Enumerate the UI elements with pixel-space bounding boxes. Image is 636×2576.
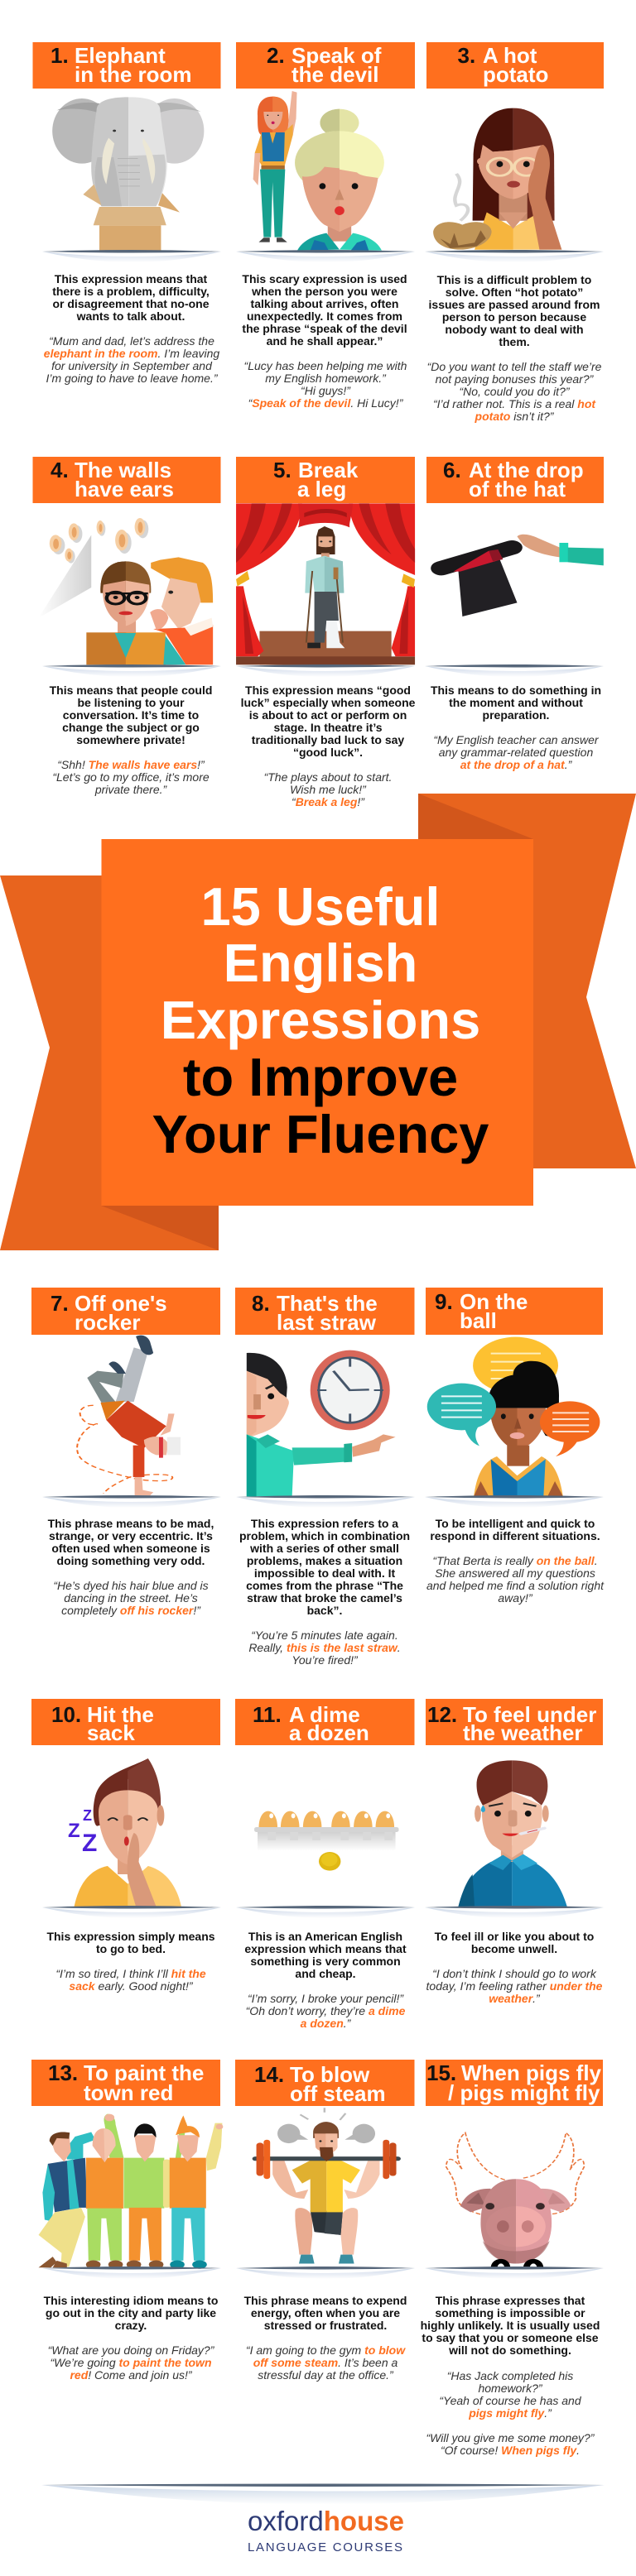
heading 3: A hot	[483, 43, 537, 68]
text: example 13: red! Come and join us!”	[70, 2368, 193, 2382]
panel 7: off one's rocker	[31, 1288, 221, 1617]
text: example 12	[426, 1967, 603, 2005]
heading 1	[33, 42, 220, 89]
icon: woman with speech bubbles	[427, 1337, 600, 1496]
text: meaning 12	[435, 1930, 594, 1955]
logo: oxford house language courses: oxfordhouse	[248, 2506, 404, 2536]
text: meaning 14: energy, often when you are	[251, 2306, 400, 2319]
text: meaning 3	[429, 273, 600, 348]
text: example 7	[53, 1579, 209, 1617]
text: meaning 15: highly unlikely. It is usually used	[421, 2319, 600, 2332]
text: meaning 15: something is impossible or	[435, 2306, 585, 2319]
text: meaning 8: with a series of other small	[249, 1542, 399, 1555]
icon: breakdancer on one hand	[77, 1336, 181, 1495]
text: example 8	[248, 1629, 401, 1667]
heading 14: off steam	[290, 2081, 386, 2106]
heading 6	[426, 457, 604, 503]
heading 2: 2.	[267, 43, 285, 68]
text: meaning 11	[244, 1930, 407, 1980]
heading 2: the devil	[292, 62, 378, 87]
text: example 14: stressful day at the office.”	[258, 2368, 394, 2382]
heading 9: On the	[460, 1289, 528, 1314]
text: example 3: not paying bonuses this year?”	[436, 372, 595, 386]
text: meaning 6: the moment and without	[449, 696, 583, 709]
text: meaning 3: nobody want to deal with	[445, 323, 584, 336]
text: meaning 8: back”.	[307, 1604, 342, 1617]
heading 10: sack	[87, 1720, 135, 1745]
text: meaning 12: become unwell.	[471, 1942, 557, 1955]
panel 4: the walls have ears	[33, 457, 221, 796]
heading 8: last straw	[277, 1310, 377, 1335]
text: example 2: “Lucy has been helping me with	[244, 359, 407, 372]
heading 11: A dime	[289, 1702, 360, 1727]
text: meaning 1: wants to talk about.	[76, 309, 185, 323]
text: meaning 8: impossible to deal with. It	[254, 1566, 396, 1580]
text: example 4: “Let’s go to my office, it’s more	[52, 770, 210, 784]
text: meaning 14: stressed or frustrated.	[264, 2319, 387, 2332]
text: example 2: “Hi guys!”	[301, 384, 351, 397]
text: meaning 3: This is a difficult problem to	[437, 273, 591, 286]
icon: yawning man	[75, 1758, 181, 1907]
panel 3: a hot potato	[425, 42, 604, 423]
text: meaning 13	[44, 2294, 218, 2332]
icon: elephant in a box	[52, 97, 204, 251]
heading 12: the weather	[463, 1720, 583, 1745]
logo: oxford house language courses	[248, 2506, 404, 2554]
heading 15: 15.	[426, 2060, 456, 2085]
heading 4: have ears	[75, 477, 174, 501]
heading 10: 10.	[51, 1702, 81, 1727]
text: meaning 8: This expression refers to a	[251, 1517, 398, 1530]
panel 12: to feel under the weather	[425, 1699, 604, 2005]
title: Your Fluency	[152, 1104, 489, 1164]
text: meaning 1: there is a problem, difficulty,	[52, 285, 210, 298]
heading 3: 3.	[457, 43, 475, 68]
text: meaning 10: to go to bed.	[96, 1942, 166, 1955]
heading 13: 13.	[48, 2060, 78, 2085]
text: example 13	[48, 2343, 215, 2382]
heading 4	[33, 457, 220, 503]
heading 12: 12.	[427, 1702, 457, 1727]
text: meaning 2: talking about arrives, often	[251, 297, 398, 310]
text: meaning 5: is about to act or perform on	[249, 708, 407, 722]
heading 12: To feel under	[463, 1702, 596, 1727]
text: example 9: She answered all my questions	[435, 1566, 595, 1580]
text: meaning 8: problem, which in combination	[239, 1529, 410, 1542]
heading 5: 5.	[273, 458, 292, 482]
text: example 2: my English homework.”	[265, 372, 387, 385]
text: example 15: “Of course! When pigs fly.	[441, 2444, 580, 2457]
text: example 11	[246, 1992, 406, 2030]
text: meaning 9	[430, 1517, 600, 1542]
text: example 15: “Yeah of course he has and	[439, 2394, 582, 2407]
panel 1: elephant in the room	[33, 42, 221, 385]
icon: man pointing at a clock	[247, 1350, 396, 1496]
text: example 8: You’re fired!”	[292, 1653, 359, 1667]
heading 9: ball	[460, 1308, 497, 1333]
text: meaning 14	[244, 2294, 407, 2332]
text: example 3: “No, could you do it?”	[459, 385, 571, 398]
text: example 5: “The plays about to start.	[264, 770, 392, 784]
text: example 14: off some steam. It’s been a	[253, 2356, 398, 2369]
heading 8: That's the	[277, 1291, 378, 1316]
text: meaning 3: issues are passed around from	[429, 298, 600, 311]
text: meaning 2: the phrase “speak of the devil	[242, 322, 407, 335]
text: meaning 3: them.	[499, 335, 530, 348]
text: meaning 5: “good luck”.	[293, 746, 363, 759]
heading 13: town red	[84, 2080, 173, 2105]
text: example 1	[44, 334, 219, 385]
heading 15: When pigs fly	[461, 2060, 602, 2085]
text: meaning 2: This scary expression is used	[242, 272, 407, 285]
text: example 3: “I’d rather not. This is a real hot	[433, 397, 596, 410]
text: example 9: and helped me find a solution right	[426, 1579, 605, 1592]
panel 15: when pigs fly	[421, 2060, 604, 2457]
heading 7: Off one's	[75, 1291, 167, 1316]
heading 1: 1.	[51, 43, 69, 68]
text: example 15: pigs might fly.”	[468, 2406, 552, 2420]
heading 13: To paint the	[84, 2060, 204, 2085]
text: example 6	[433, 733, 600, 771]
text: example 14	[246, 2343, 406, 2382]
text: example 15	[426, 2369, 595, 2457]
text: meaning 3: person to person because	[442, 310, 586, 324]
icon: weightlifter blowing steam	[253, 2108, 401, 2264]
text: meaning 10: This expression simply means	[46, 1930, 215, 1943]
heading 11: a dozen	[289, 1720, 369, 1745]
text: example 1: “Mum and dad, let’s address the	[49, 334, 214, 348]
text: meaning 11: something is very common	[250, 1955, 401, 1968]
text: meaning 6	[431, 684, 601, 722]
icon: ears on wall and two men whispering	[39, 518, 213, 664]
text: example 12: today, I’m feeling rather under the	[426, 1979, 603, 1993]
text: meaning 2: unexpectedly. It comes from	[247, 309, 402, 323]
text: example 11: “I’m sorry, I broke your pencil!”	[248, 1992, 404, 2005]
icon: eggs in a tray and a dime	[254, 1811, 398, 1871]
panel 11: a dime a dozen	[235, 1699, 415, 2030]
text: example 12: “I don’t think I should go to work	[432, 1967, 597, 1980]
icon: pig with dashed wings	[446, 2132, 584, 2267]
text: meaning 2: when the person you were	[251, 285, 398, 298]
logo: oxford house language courses: LANGUAGE COURSES	[248, 2540, 402, 2554]
heading 7: 7.	[51, 1291, 69, 1316]
text: meaning 4: This means that people could	[50, 684, 212, 697]
icon: four friends partying	[39, 2114, 223, 2269]
text: meaning 4: change the subject or go	[62, 721, 200, 734]
text: meaning 5: This expression means “good	[245, 684, 411, 697]
icon: man on crutches on a theatre stage	[236, 503, 415, 664]
title: to Improve	[183, 1047, 458, 1107]
heading 10: Hit the	[87, 1702, 154, 1727]
text: meaning 11: expression which means that	[244, 1942, 407, 1955]
icon: hand dropping a top hat	[441, 535, 604, 616]
icon: sleeping Zs	[68, 1807, 97, 1857]
text: meaning 7: strange, or very eccentric. It’s	[49, 1529, 213, 1542]
text: meaning 8: comes from the phrase “The	[246, 1579, 403, 1592]
text: example 8: Really, this is the last straw.	[248, 1641, 401, 1654]
heading 10	[31, 1699, 220, 1745]
text: meaning 2	[242, 272, 407, 348]
text: example 3	[427, 360, 602, 423]
panel 6: at the drop of the hat	[425, 457, 604, 771]
text: example 6: at the drop of a hat.”	[460, 758, 573, 771]
text: meaning 4: conversation. It’s time to	[63, 708, 199, 722]
text: meaning 7: often used when someone is	[51, 1542, 210, 1555]
text: example 4	[52, 758, 210, 796]
text: meaning 10	[46, 1930, 215, 1955]
panel 2: speak of the devil	[236, 42, 415, 410]
text: example 10	[55, 1967, 206, 1993]
heading 8	[235, 1288, 414, 1335]
heading 5	[236, 457, 415, 503]
text: example 6: “My English teacher can answer	[433, 733, 600, 746]
text: example 5	[264, 770, 392, 808]
heading 4: 4.	[51, 458, 69, 482]
heading 14: To blow	[290, 2062, 370, 2087]
text: example 5: Wish me luck!”	[290, 783, 367, 796]
banner: main title panel	[101, 839, 533, 1206]
text: meaning 15	[421, 2294, 600, 2357]
text: meaning 1: or disagreement that no-one	[52, 297, 210, 310]
heading 6: of the hat	[469, 477, 566, 501]
text: example 7: completely off his rocker!”	[61, 1604, 201, 1617]
text: meaning 7	[48, 1517, 214, 1567]
text: example 14: “I am going to the gym to blow	[246, 2343, 406, 2357]
text: meaning 5: stage. In theatre it’s	[274, 721, 383, 734]
text: example 1: I’m going to have to leave home.”	[46, 372, 219, 385]
text: example 7: dancing in the street. He’s	[64, 1591, 198, 1605]
text: example 9	[426, 1554, 605, 1605]
text: meaning 8: problems, makes a situation	[247, 1554, 402, 1567]
heading 3	[426, 42, 604, 89]
text: meaning 9: To be intelligent and quick to	[436, 1517, 595, 1530]
text: example 12: weather.”	[489, 1992, 541, 2005]
heading 5: Break	[298, 458, 359, 482]
heading 6: 6.	[443, 458, 461, 482]
heading 11	[235, 1699, 414, 1745]
text: example 7: “He’s dyed his hair blue and is	[53, 1579, 209, 1592]
text: meaning 3: solve. Often “hot potato”	[446, 285, 583, 299]
text: meaning 5: luck” especially when someone	[241, 696, 416, 709]
heading 14: 14.	[254, 2062, 284, 2087]
text: meaning 1	[52, 272, 210, 323]
text: meaning 8: straw that broke the camel’s	[247, 1591, 402, 1605]
heading 2: Speak of	[292, 43, 382, 68]
text: example 9: “That Berta is really on the ball.	[432, 1554, 598, 1567]
heading 15	[426, 2060, 603, 2106]
text: example 15: “Has Jack completed his	[447, 2369, 573, 2382]
title	[152, 876, 489, 1164]
text: meaning 13: go out in the city and party like	[46, 2306, 216, 2319]
text: meaning 15: to say that you or someone else	[422, 2331, 599, 2344]
heading 14	[235, 2060, 414, 2106]
text: example 15: homework?”	[478, 2382, 543, 2395]
heading 7	[31, 1288, 220, 1335]
heading 13	[31, 2060, 220, 2106]
icon: woman with glasses and steaming potato	[433, 108, 561, 250]
panel 14: to blow off steam	[235, 2060, 415, 2382]
text: example 5: “Break a leg!”	[292, 795, 365, 808]
text: meaning 13: crazy.	[115, 2319, 147, 2332]
icon: sleeping Zs: Z	[68, 1820, 80, 1842]
text: example 6: any grammar-related question	[439, 746, 593, 759]
text: example 1: for university in September and	[51, 359, 213, 372]
text: meaning 15: will not do something.	[448, 2343, 571, 2357]
heading 4: The walls	[75, 458, 171, 482]
text: example 2: “Speak of the devil. Hi Lucy!”	[248, 396, 404, 410]
text: meaning 15: This phrase expresses that	[436, 2294, 585, 2307]
heading 6: At the drop	[469, 458, 584, 482]
heading 1: Elephant	[75, 43, 166, 68]
text: meaning 13: This interesting idiom means to	[44, 2294, 218, 2307]
panel 5: break a leg	[236, 457, 416, 808]
text: meaning 2: and he shall appear.”	[267, 334, 383, 348]
icon: sleeping Zs: Z	[82, 1830, 97, 1857]
text: meaning 9: respond in different situations.	[430, 1529, 600, 1542]
heading 9: 9.	[435, 1289, 453, 1314]
text: example 1: elephant in the room. I’m leaving	[44, 347, 219, 360]
text: example 10: sack early. Good night!”	[69, 1979, 194, 1993]
text: example 4: “Shh! The walls have ears!”	[57, 758, 205, 771]
text: example 13: “What are you doing on Friday?”	[48, 2343, 215, 2357]
heading 12	[426, 1699, 603, 1745]
icon: blonde woman and redhead arriving	[253, 91, 384, 251]
text: meaning 1: This expression means that	[55, 272, 208, 285]
text: meaning 8	[239, 1517, 410, 1617]
icon: sleeping Zs: Z	[83, 1807, 92, 1824]
icon: sick man with thermometer	[458, 1760, 567, 1907]
text: example 4: private there.”	[94, 783, 168, 796]
heading 9	[426, 1288, 603, 1335]
heading 5: a leg	[297, 477, 346, 501]
panel 9: on the ball	[425, 1288, 605, 1605]
text: meaning 11: This is an American English	[248, 1930, 402, 1943]
text: meaning 5	[241, 684, 416, 759]
heading 11: 11.	[253, 1702, 282, 1727]
heading 7: rocker	[75, 1310, 141, 1335]
text: example 3: potato isn’t it?”	[475, 410, 555, 423]
heading 15: / pigs might fly	[448, 2080, 600, 2105]
text: meaning 11: and cheap.	[295, 1967, 356, 1980]
panel 10: hit the sack	[31, 1699, 221, 1993]
heading 1: in the room	[75, 62, 192, 87]
text: example 13: “We’re going to paint the town	[50, 2356, 212, 2369]
text: example 10: “I’m so tired, I think I’ll hit the	[55, 1967, 206, 1980]
text: meaning 4	[50, 684, 212, 746]
text: example 11: “Oh don’t worry, they’re a dime	[246, 2004, 406, 2017]
text: example 11: a dozen.”	[301, 2017, 352, 2030]
panel 8: that's the last straw	[235, 1288, 415, 1667]
text: meaning 6: This means to do something in	[431, 684, 601, 697]
text: meaning 7: This phrase means to be mad,	[48, 1517, 214, 1530]
text: example 8: “You’re 5 minutes late again.	[251, 1629, 398, 1642]
text: meaning 4: somewhere private!	[76, 733, 186, 746]
title: English	[224, 933, 417, 993]
text: meaning 12: To feel ill or like you about to	[435, 1930, 594, 1943]
banner: back ribbons	[0, 794, 636, 1250]
title: Expressions	[161, 990, 480, 1050]
title: 15 Useful	[200, 876, 441, 937]
text: example 9: away!”	[498, 1591, 533, 1605]
heading 2	[236, 42, 415, 89]
text: example 2	[244, 359, 407, 410]
text: example 3: “Do you want to tell the staff we’re	[427, 360, 602, 373]
text: meaning 6: preparation.	[483, 708, 549, 722]
text: meaning 5: traditionally bad luck to say	[252, 733, 404, 746]
text: meaning 14: This phrase means to expend	[244, 2294, 407, 2307]
heading 8: 8.	[252, 1291, 270, 1316]
panel 13: to paint the town red	[31, 2060, 223, 2382]
text: example 15: “Will you give me some money?”	[426, 2431, 595, 2444]
text: meaning 7: doing something very odd.	[57, 1554, 205, 1567]
text: meaning 4: be listening to your	[77, 696, 185, 709]
heading 3: potato	[483, 62, 548, 87]
